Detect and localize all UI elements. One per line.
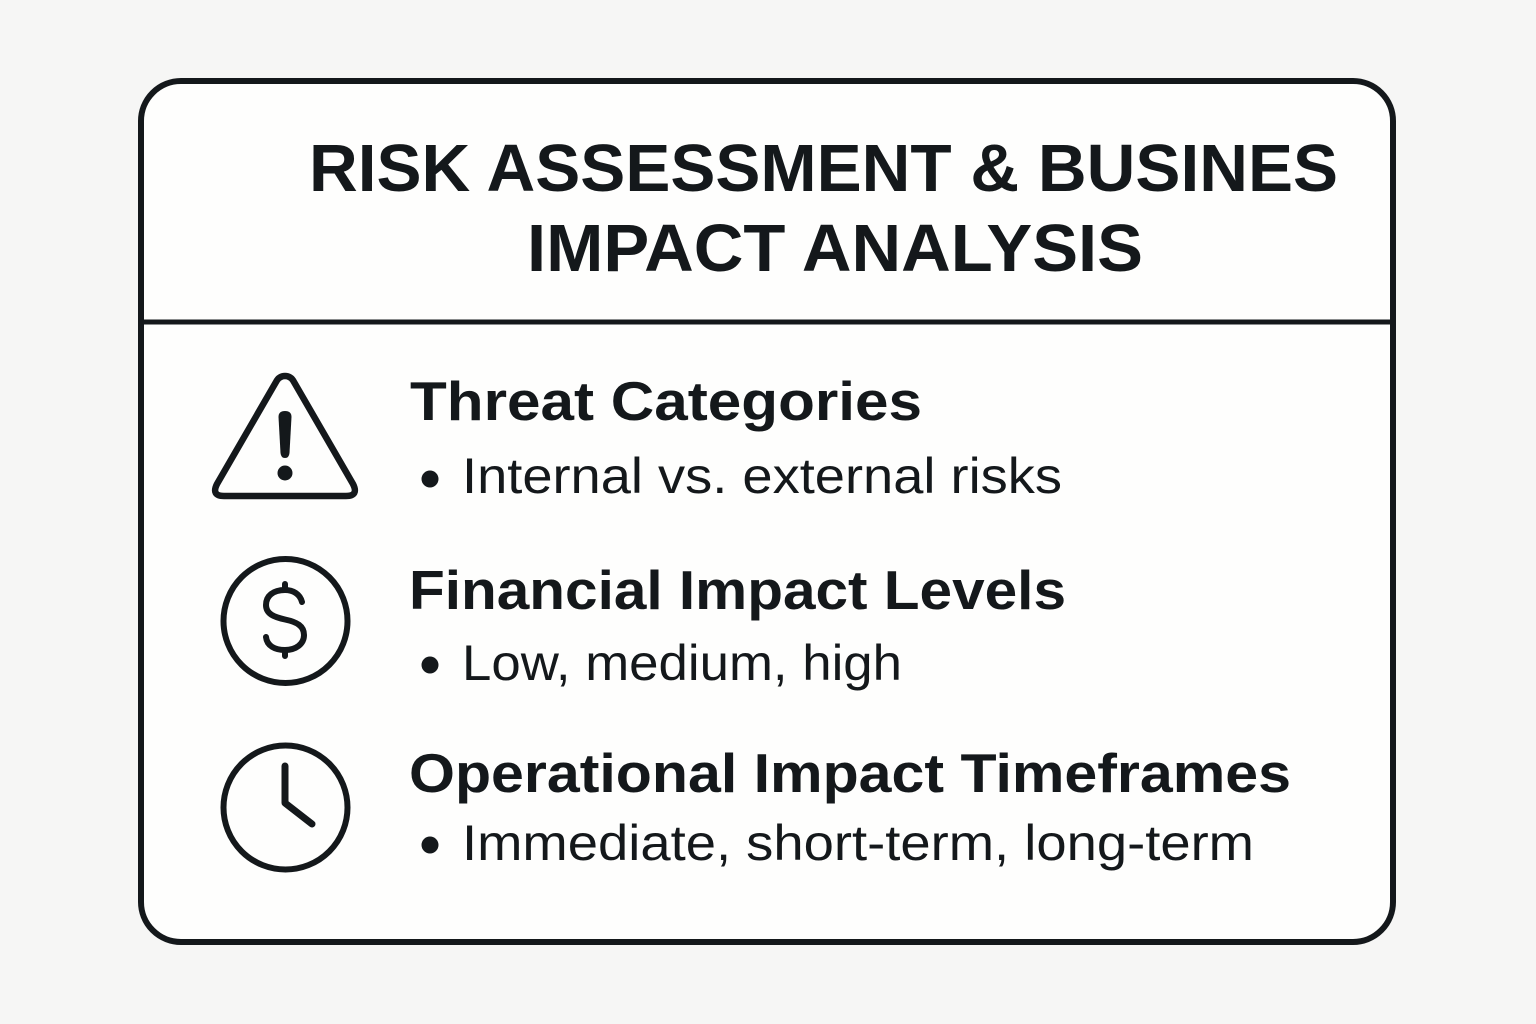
heading: threat categories: Threat Categories <box>410 370 922 432</box>
heading: financial impact levels: Financial Impact Levels <box>409 559 1066 621</box>
title: IMPACT ANALYSIS <box>527 211 1143 286</box>
icon: warning triangle <box>215 376 355 496</box>
icon: clock <box>224 746 348 870</box>
title <box>309 131 1338 286</box>
text: internal vs. external risks: Internal vs. external risks <box>462 448 1062 504</box>
icon: dollar circle <box>224 559 348 683</box>
title: RISK ASSESSMENT & BUSINES <box>309 131 1338 206</box>
heading: operational impact timeframes: Operational Impact Timeframes <box>409 742 1291 804</box>
text: low, medium, high: Low, medium, high <box>462 635 902 691</box>
bullet: operational impact timeframes <box>422 836 438 854</box>
text: immediate, short-term, long-term: Immediate, short-term, long-term <box>462 815 1254 871</box>
bullet: threat categories <box>422 470 438 488</box>
panel: main card <box>141 81 1393 942</box>
bullet: financial impact levels <box>422 656 438 674</box>
